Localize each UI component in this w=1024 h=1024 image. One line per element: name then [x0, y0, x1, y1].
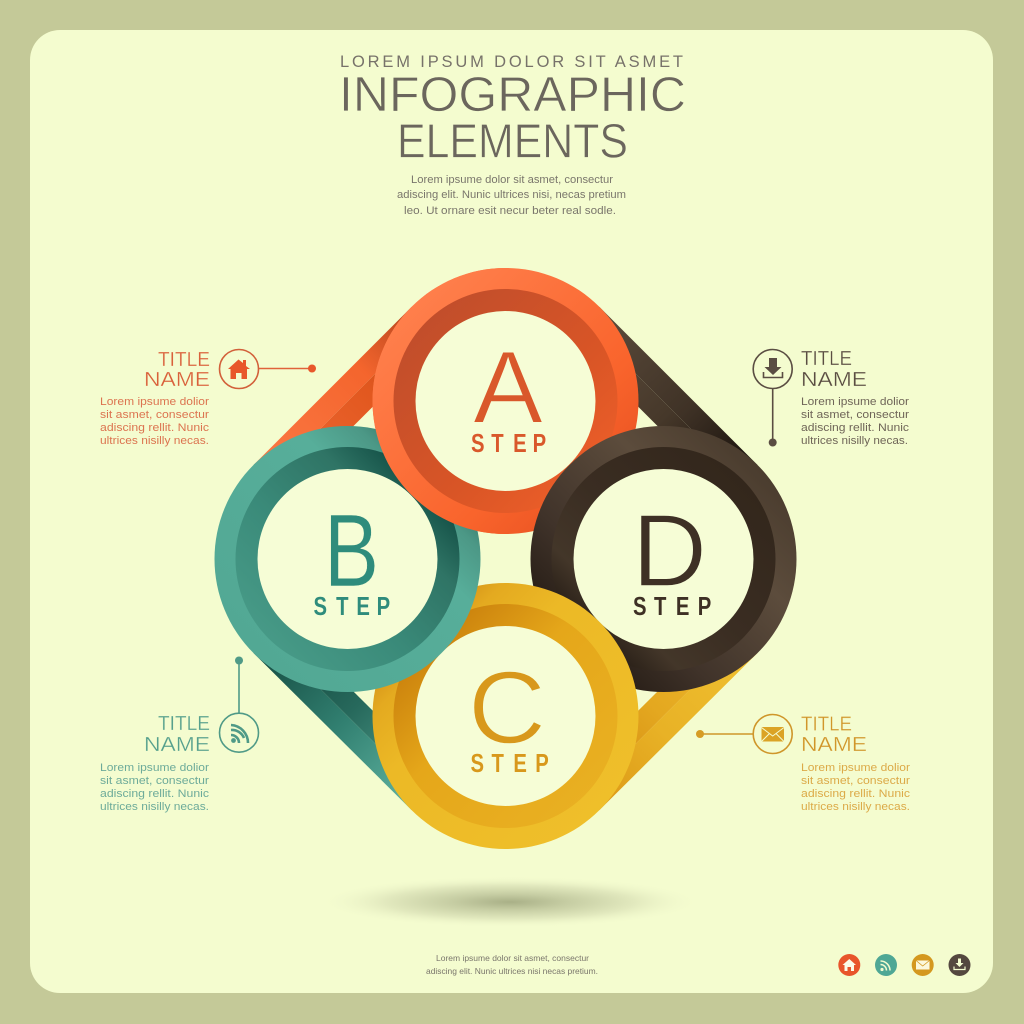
- main title line two: ELEMENTS: [397, 116, 628, 168]
- icon: home: [220, 350, 258, 388]
- callout body text: [100, 396, 210, 447]
- callout title: TITLE: [801, 348, 852, 370]
- callout title: TITLE: [801, 714, 852, 736]
- connector and dot: [259, 364, 316, 372]
- icon: download badge: [948, 954, 970, 976]
- callout body text: sit asmet, consectur: [801, 775, 911, 787]
- callout body text: ultrices nisilly necas.: [801, 801, 910, 813]
- callout body text: Lorem ipsume dolior: [801, 762, 911, 774]
- icon: envelope badge: [912, 954, 934, 976]
- ring B teal: [214, 426, 480, 692]
- ring C yellow: [372, 583, 638, 849]
- callout: dark top right: [753, 348, 910, 447]
- callout title: NAME: [144, 369, 210, 391]
- step D label: STEP: [633, 592, 711, 621]
- icon: download: [753, 350, 792, 388]
- callout body text: [801, 396, 910, 447]
- callout title: NAME: [801, 734, 867, 756]
- footer text: [426, 953, 598, 976]
- callout title: TITLE: [158, 713, 210, 735]
- callout body text: [801, 762, 911, 813]
- callout body text: [100, 762, 210, 813]
- intro paragraph: Lorem ipsume dolor sit asmet, consectur: [411, 174, 613, 186]
- step B label: B: [324, 493, 379, 608]
- main title line one: INFOGRAPHIC: [339, 68, 686, 122]
- callout body text: adiscing rellit. Nunic: [100, 788, 210, 800]
- intro paragraph: adiscing elit. Nunic ultrices nisi, necas pretium: [397, 189, 626, 201]
- callout title: [144, 349, 210, 391]
- callout title: NAME: [144, 734, 210, 756]
- callout title: NAME: [801, 369, 867, 391]
- band: orange connecting A and B: [254, 307, 442, 496]
- step A label: STEP: [471, 429, 546, 458]
- callout body text: ultrices nisilly necas.: [801, 435, 908, 447]
- band: yellow connecting D and C: [569, 622, 758, 810]
- kicker line: LOREM IPSUM DOLOR SIT ASMET: [340, 53, 683, 71]
- band: dark connecting A and D: [569, 307, 758, 496]
- callout body text: ultrices nisilly necas.: [100, 435, 209, 447]
- callout title: [801, 348, 867, 391]
- ring A overlap over ring B: [372, 268, 505, 534]
- callout body text: sit asmet, consectur: [801, 409, 910, 421]
- band: teal connecting B and C: [254, 622, 442, 810]
- footer icon row: [838, 954, 970, 976]
- callout: teal bottom left: [100, 656, 258, 813]
- icon: home badge: [838, 954, 860, 976]
- connector and dot: [769, 389, 777, 446]
- intro paragraph: leo. Ut ornare esit necur beter real sodle.: [404, 205, 616, 217]
- intro paragraph: [397, 174, 626, 217]
- connector and dot: [696, 730, 753, 738]
- step B label: STEP: [314, 592, 390, 621]
- callout title: [144, 713, 210, 756]
- step A label: A: [473, 330, 543, 445]
- callout body text: sit asmet, consectur: [100, 775, 210, 787]
- callout title: [801, 714, 867, 756]
- callout body text: Lorem ipsume dolior: [100, 396, 210, 408]
- step C label: STEP: [470, 749, 549, 778]
- callout: orange top left: [100, 349, 316, 447]
- callout body text: Lorem ipsume dolior: [801, 396, 910, 408]
- callout title: TITLE: [158, 349, 210, 371]
- callout body text: ultrices nisilly necas.: [100, 801, 209, 813]
- header titles: [339, 53, 686, 168]
- footer text: Lorem ipsume dolor sit asmet, consectur: [436, 953, 589, 963]
- icon: rss: [220, 713, 258, 752]
- callout body text: adiscing rellit. Nunic: [100, 422, 210, 434]
- callout body text: adiscing rellit. Nunic: [801, 422, 910, 434]
- callout body text: adiscing rellit. Nunic: [801, 788, 911, 800]
- footer text: adiscing elit. Nunic ultrices nisi necas pretium.: [426, 966, 598, 976]
- callout: yellow bottom right: [696, 714, 911, 813]
- icon: rss badge: [875, 954, 897, 976]
- connector and dot: [235, 656, 243, 713]
- ring A orange: [372, 268, 638, 534]
- ring D dark: [530, 426, 796, 692]
- callout body text: Lorem ipsume dolior: [100, 762, 210, 774]
- callout body text: sit asmet, consectur: [100, 409, 210, 421]
- step D label: D: [632, 493, 707, 608]
- step C label: C: [468, 650, 546, 765]
- icon: envelope: [753, 714, 792, 754]
- ground shadow: [318, 876, 702, 928]
